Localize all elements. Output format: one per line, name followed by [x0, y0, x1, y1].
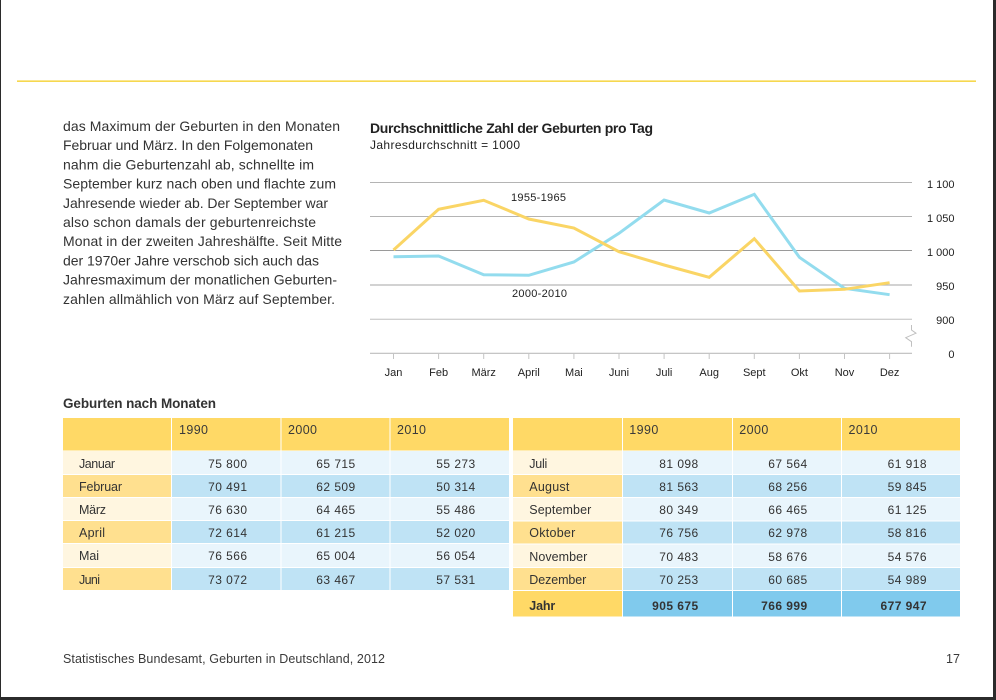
body text: Jahresmaximum der monatlichen Geburten- — [63, 272, 337, 288]
table rows: Dezember — [529, 573, 586, 587]
x axis labels: Sept — [743, 367, 766, 379]
table rows: 57 531 — [436, 573, 476, 587]
body text: nahm die Geburtenzahl ab, schnellte im — [63, 156, 314, 172]
table rows: 61 918 — [888, 457, 927, 471]
y axis labels: 900 — [936, 315, 954, 327]
table rows: 54 989 — [888, 573, 927, 587]
y axis labels: 1 000 — [927, 247, 954, 259]
table header — [179, 423, 426, 437]
table rows: 60 685 — [768, 573, 808, 587]
table rows: April — [79, 526, 105, 540]
table total row: Jahr — [529, 599, 555, 613]
table header: 1990 — [629, 423, 658, 437]
table header: 2010 — [397, 423, 426, 437]
table rows: Oktober — [529, 526, 575, 540]
y axis labels: 1 050 — [927, 213, 954, 225]
axis break — [906, 325, 916, 347]
table total row: 766 999 — [761, 599, 808, 613]
body text: das Maximum der Geburten in den Monaten — [63, 118, 340, 134]
table rows: September — [529, 503, 591, 517]
table rows: Februar — [79, 480, 122, 494]
table rows: 81 098 — [659, 457, 699, 471]
table rows: 65 715 — [316, 457, 356, 471]
x axis labels: April — [518, 367, 540, 379]
table rows: August — [529, 480, 570, 494]
x axis labels: Dez — [880, 367, 899, 379]
table header: 1990 — [179, 423, 208, 437]
table rows: 63 467 — [316, 573, 356, 587]
x axis labels: Juni — [609, 367, 629, 379]
table rows: 55 273 — [436, 457, 476, 471]
table rows: 52 020 — [436, 526, 476, 540]
table: January to June — [63, 418, 509, 590]
chart subtitle: Jahresdurchschnitt = 1000 — [370, 138, 520, 152]
x axis labels: Okt — [791, 367, 808, 379]
x axis labels: Mai — [565, 367, 583, 379]
table backgrounds — [513, 418, 960, 616]
body text: September kurz nach oben und flachte zum — [63, 176, 336, 192]
table rows: 80 349 — [659, 503, 699, 517]
table rows: 59 845 — [888, 480, 927, 494]
page number: 17 — [946, 652, 960, 666]
table rows: 58 676 — [768, 550, 808, 564]
table rows: Juli — [529, 457, 547, 471]
table rows: 65 004 — [316, 549, 356, 563]
series 2000-2010 — [394, 194, 890, 295]
table rows: 68 256 — [768, 480, 808, 494]
body text: Jahresende wieder ab. Der September war — [63, 195, 328, 211]
body text — [63, 118, 342, 307]
label 1955-1965: 1955-1965 — [511, 192, 566, 204]
x axis labels: Feb — [429, 367, 448, 379]
x axis labels: März — [471, 367, 496, 379]
table total row: 905 675 — [652, 599, 699, 613]
y axis labels: 0 — [948, 349, 954, 361]
table rows: 50 314 — [436, 480, 476, 494]
table header: 2010 — [848, 423, 878, 437]
table rows: 67 564 — [768, 457, 808, 471]
table total row — [529, 599, 927, 613]
table rows: 55 486 — [436, 503, 476, 517]
table rows: 76 756 — [659, 526, 699, 540]
table rows — [529, 457, 927, 587]
table rows: 54 576 — [888, 550, 927, 564]
table rows: 66 465 — [768, 503, 808, 517]
table rows: 76 566 — [208, 549, 248, 563]
table rows: 61 125 — [888, 503, 927, 517]
table rows: 72 614 — [208, 526, 248, 540]
table rows: Januar — [79, 457, 115, 471]
table rows: November — [529, 550, 587, 564]
body text: also schon damals der geburtenreichste — [63, 214, 316, 230]
table total row: 677 947 — [880, 599, 927, 613]
table: July to December and year — [513, 418, 960, 616]
table rows: März — [79, 503, 106, 517]
table heading: Geburten nach Monaten — [63, 396, 216, 411]
body text: der 1970er Jahre verschob sich auch das — [63, 252, 319, 268]
x axis labels — [385, 367, 899, 379]
body text: zahlen allmählich von März auf September. — [63, 291, 335, 307]
table rows: 76 630 — [208, 503, 248, 517]
table rows: Mai — [79, 549, 99, 563]
series 1955-1965 — [394, 200, 890, 291]
y axis labels: 950 — [936, 281, 954, 293]
table rows: 75 800 — [208, 457, 248, 471]
body text: Monat in der zweiten Jahreshälfte. Seit Mitte — [63, 233, 342, 249]
table rows: Juni — [79, 573, 100, 587]
table rows: 62 509 — [316, 480, 356, 494]
x axis labels: Juli — [656, 367, 672, 379]
y axis labels: 1 100 — [927, 179, 954, 191]
x axis labels: Jan — [385, 367, 402, 379]
body text: Februar und März. In den Folgemonaten — [63, 137, 313, 153]
table backgrounds — [63, 418, 509, 590]
source footer: Statistisches Bundesamt, Geburten in Deutschland, 2012 — [63, 652, 385, 666]
y axis labels — [927, 179, 954, 361]
x axis labels: Aug — [699, 367, 719, 379]
table rows: 56 054 — [436, 549, 476, 563]
table rows: 61 215 — [316, 526, 356, 540]
table rows: 70 491 — [208, 480, 248, 494]
table rows: 58 816 — [888, 526, 927, 540]
table rows: 70 483 — [659, 550, 699, 564]
table header: 2000 — [739, 423, 768, 437]
table rows: 62 978 — [768, 526, 808, 540]
chart title: Durchschnittliche Zahl der Geburten pro Tag — [370, 120, 653, 136]
line chart — [370, 179, 954, 379]
label 2000-2010: 2000-2010 — [512, 288, 567, 300]
table rows: 73 072 — [208, 573, 248, 587]
table rows: 64 465 — [316, 503, 356, 517]
table rows: 70 253 — [659, 573, 699, 587]
table header — [629, 423, 878, 437]
table rows — [79, 457, 476, 587]
table rows: 81 563 — [659, 480, 699, 494]
x axis labels: Nov — [835, 367, 855, 379]
table header: 2000 — [288, 423, 317, 437]
